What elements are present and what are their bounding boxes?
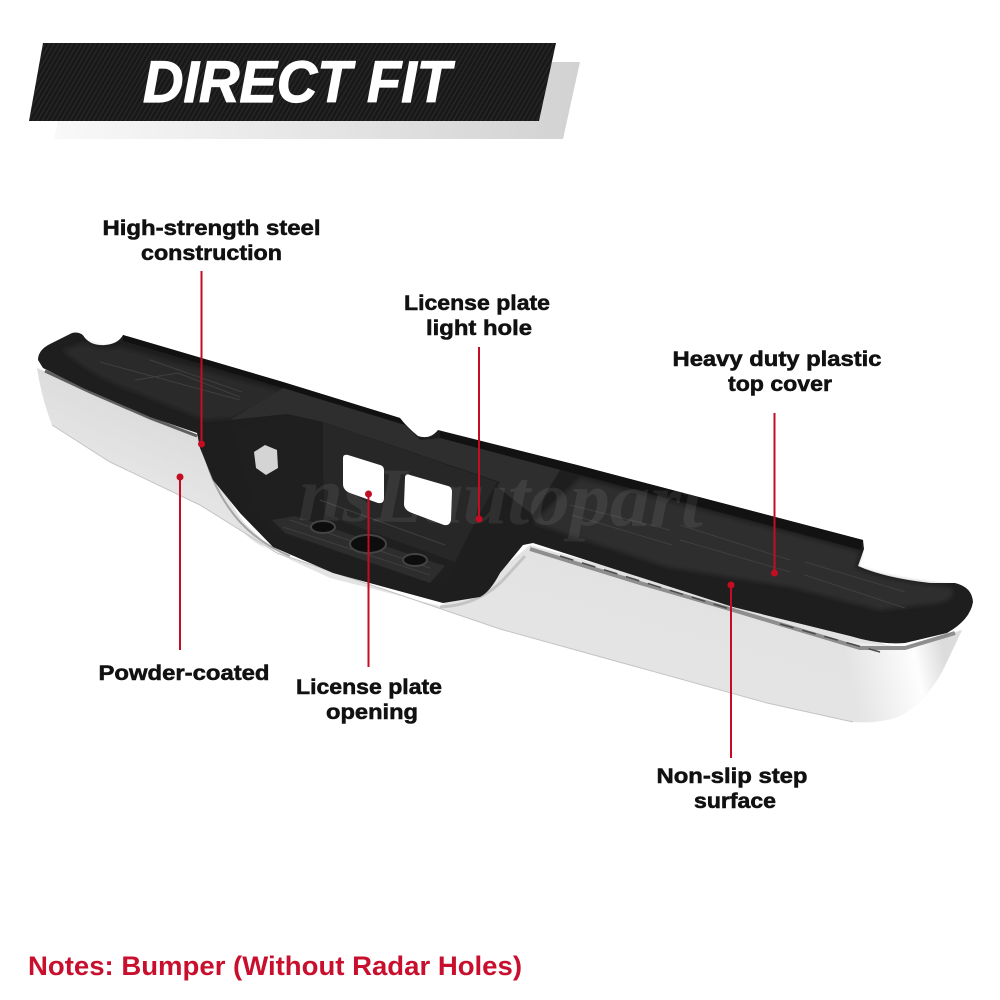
watermark: nsLautopart <box>298 450 707 544</box>
callout: license plate opening: License plate <box>296 676 442 699</box>
recess interior <box>323 422 497 562</box>
black plastic top cover <box>38 333 973 643</box>
notes: Notes: Bumper (Without Radar Holes) <box>28 951 522 981</box>
title banner <box>29 43 580 139</box>
callout: non-slip step surface <box>656 582 808 813</box>
recess frame <box>233 415 500 584</box>
step surface right <box>533 478 953 610</box>
callout: license plate light hole: light hole <box>426 317 532 340</box>
bumper product image <box>37 333 973 722</box>
callout: powder-coated <box>98 474 270 685</box>
license plate openings <box>343 455 384 503</box>
callout: license plate opening <box>296 490 442 724</box>
callout: license plate light hole: License plate <box>404 292 550 315</box>
step surface left <box>62 343 283 420</box>
step grooves <box>100 360 905 608</box>
callout: powder-coated: Powder-coated <box>98 662 270 685</box>
callout: high-strength steel: construction <box>141 242 282 265</box>
callout: license plate light hole <box>404 292 550 522</box>
callout: heavy duty plastic top cover <box>672 348 882 576</box>
callout: non-slip step surface: surface <box>694 790 776 813</box>
chrome right end highlight <box>840 630 962 722</box>
center upper band <box>230 388 560 515</box>
callout: high-strength steel: High-strength steel <box>102 217 320 240</box>
callout: heavy duty plastic top cover: top cover <box>728 373 832 396</box>
side hole <box>254 445 278 475</box>
callout: license plate opening: opening <box>326 701 418 724</box>
chrome body right <box>200 440 962 722</box>
callout: heavy duty plastic top cover: Heavy duty plastic <box>672 348 882 371</box>
chrome body left <box>37 368 277 553</box>
callout: high-strength steel <box>102 217 320 448</box>
chrome trim <box>45 371 197 436</box>
title text: DIRECT FIT <box>143 50 455 115</box>
callout: non-slip step surface: Non-slip step <box>656 765 808 788</box>
bolt holes <box>311 521 427 566</box>
